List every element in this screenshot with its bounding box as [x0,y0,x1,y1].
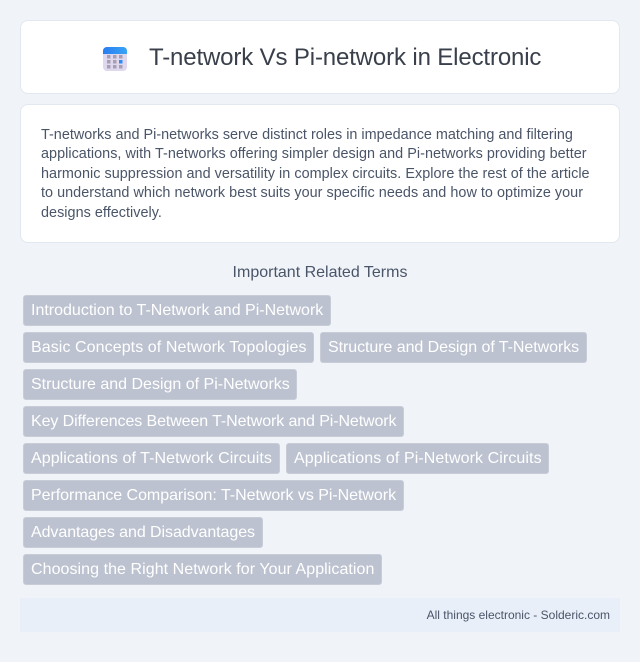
intro text panel [20,104,620,243]
related terms heading: Important Related Terms [233,264,407,281]
tag [23,295,331,326]
tag [23,406,404,437]
tag [23,480,404,511]
tag: Choosing the Right Network for Your Application [31,561,374,578]
tag [23,369,297,400]
tag [23,517,263,548]
title: T-network Vs Pi-network in Electronic [149,44,541,71]
icon: calendar [103,47,127,71]
tag: Advantages and Disadvantages [31,524,255,541]
intro paragraph: to understand which network best suits your specific needs and how to optimize your [41,185,583,201]
related terms tags [23,295,587,585]
tag [286,443,549,474]
tag [23,443,280,474]
tag: Performance Comparison: T-Network vs Pi-Network [31,487,396,504]
intro paragraph: harmonic suppression and versatility in complex circuits. Explore the rest of the article [41,166,590,182]
tag: Structure and Design of Pi-Networks [31,376,290,393]
tag: Introduction to T-Network and Pi-Network [31,302,323,319]
header panel [20,20,620,94]
tag: Applications of T-Network Circuits [31,450,272,467]
intro paragraph: T-networks and Pi-networks serve distinct roles in impedance matching and filtering [41,127,573,143]
intro paragraph: applications, with T-networks offering simpler design and Pi-networks providing better [41,146,587,162]
footer credit: All things electronic - Solderic.com [427,608,610,622]
tag: Key Differences Between T-Network and Pi-Network [31,413,396,430]
footer bar [20,598,620,632]
tag: Basic Concepts of Network Topologies [31,339,307,356]
tag [23,554,382,585]
tag [23,332,314,363]
tag: Structure and Design of T-Networks [328,339,579,356]
tag: Applications of Pi-Network Circuits [294,450,542,467]
intro paragraph: designs effectively. [41,205,162,221]
intro paragraph [41,127,590,221]
tag [320,332,587,363]
